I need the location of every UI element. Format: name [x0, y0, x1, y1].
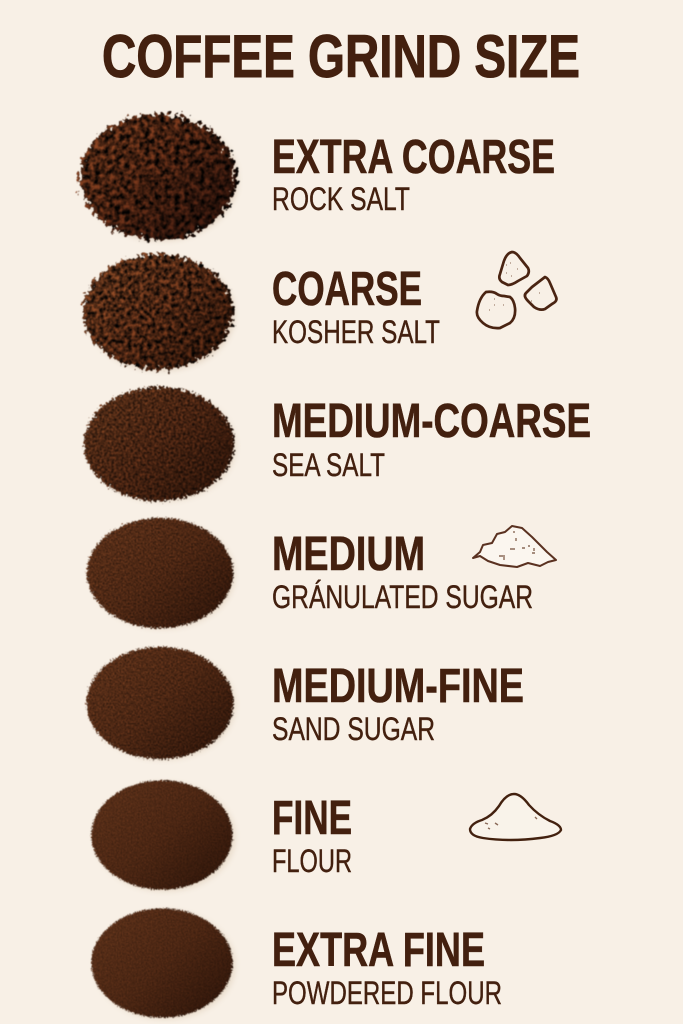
sublabel: sand sugar: SAND SUGAR — [272, 711, 435, 747]
sublabel: kosher salt: KOSHER SALT — [272, 314, 440, 350]
coffee pile: medium — [87, 518, 235, 629]
row: extra coarse — [80, 114, 555, 241]
row: extra fine — [92, 908, 502, 1020]
sublabel: granulated sugar: GRÁNULATED SUGAR — [272, 579, 533, 615]
coffee pile: medium-coarse — [84, 387, 236, 502]
coffee pile: medium-fine — [86, 647, 236, 760]
coffee pile: extra coarse — [80, 114, 238, 241]
row: medium-fine — [86, 647, 524, 760]
coffee pile: fine — [92, 780, 236, 892]
icon: salt crystals — [477, 252, 556, 328]
coffee pile: coarse — [83, 254, 235, 371]
sublabel: powdered flour: POWDERED FLOUR — [272, 975, 502, 1011]
icon: sugar mound — [473, 526, 556, 567]
coffee pile: extra fine — [92, 908, 236, 1020]
sublabel: rock salt: ROCK SALT — [272, 181, 410, 217]
label: medium: MEDIUM — [272, 528, 425, 581]
row: coarse — [83, 252, 556, 371]
label: extra fine: EXTRA FINE — [272, 924, 485, 977]
label: fine: FINE — [272, 792, 352, 845]
label: medium-fine: MEDIUM-FINE — [272, 660, 524, 713]
sublabel: sea salt: SEA SALT — [272, 447, 385, 483]
icon: flour mound — [470, 794, 561, 840]
row: medium-coarse — [84, 387, 591, 502]
row: fine — [92, 780, 561, 892]
label: extra coarse: EXTRA COARSE — [272, 131, 555, 184]
sublabel: flour: FLOUR — [272, 843, 352, 879]
row: medium — [87, 518, 556, 629]
label: medium-coarse: MEDIUM-COARSE — [272, 395, 591, 448]
label: coarse: COARSE — [272, 263, 422, 316]
